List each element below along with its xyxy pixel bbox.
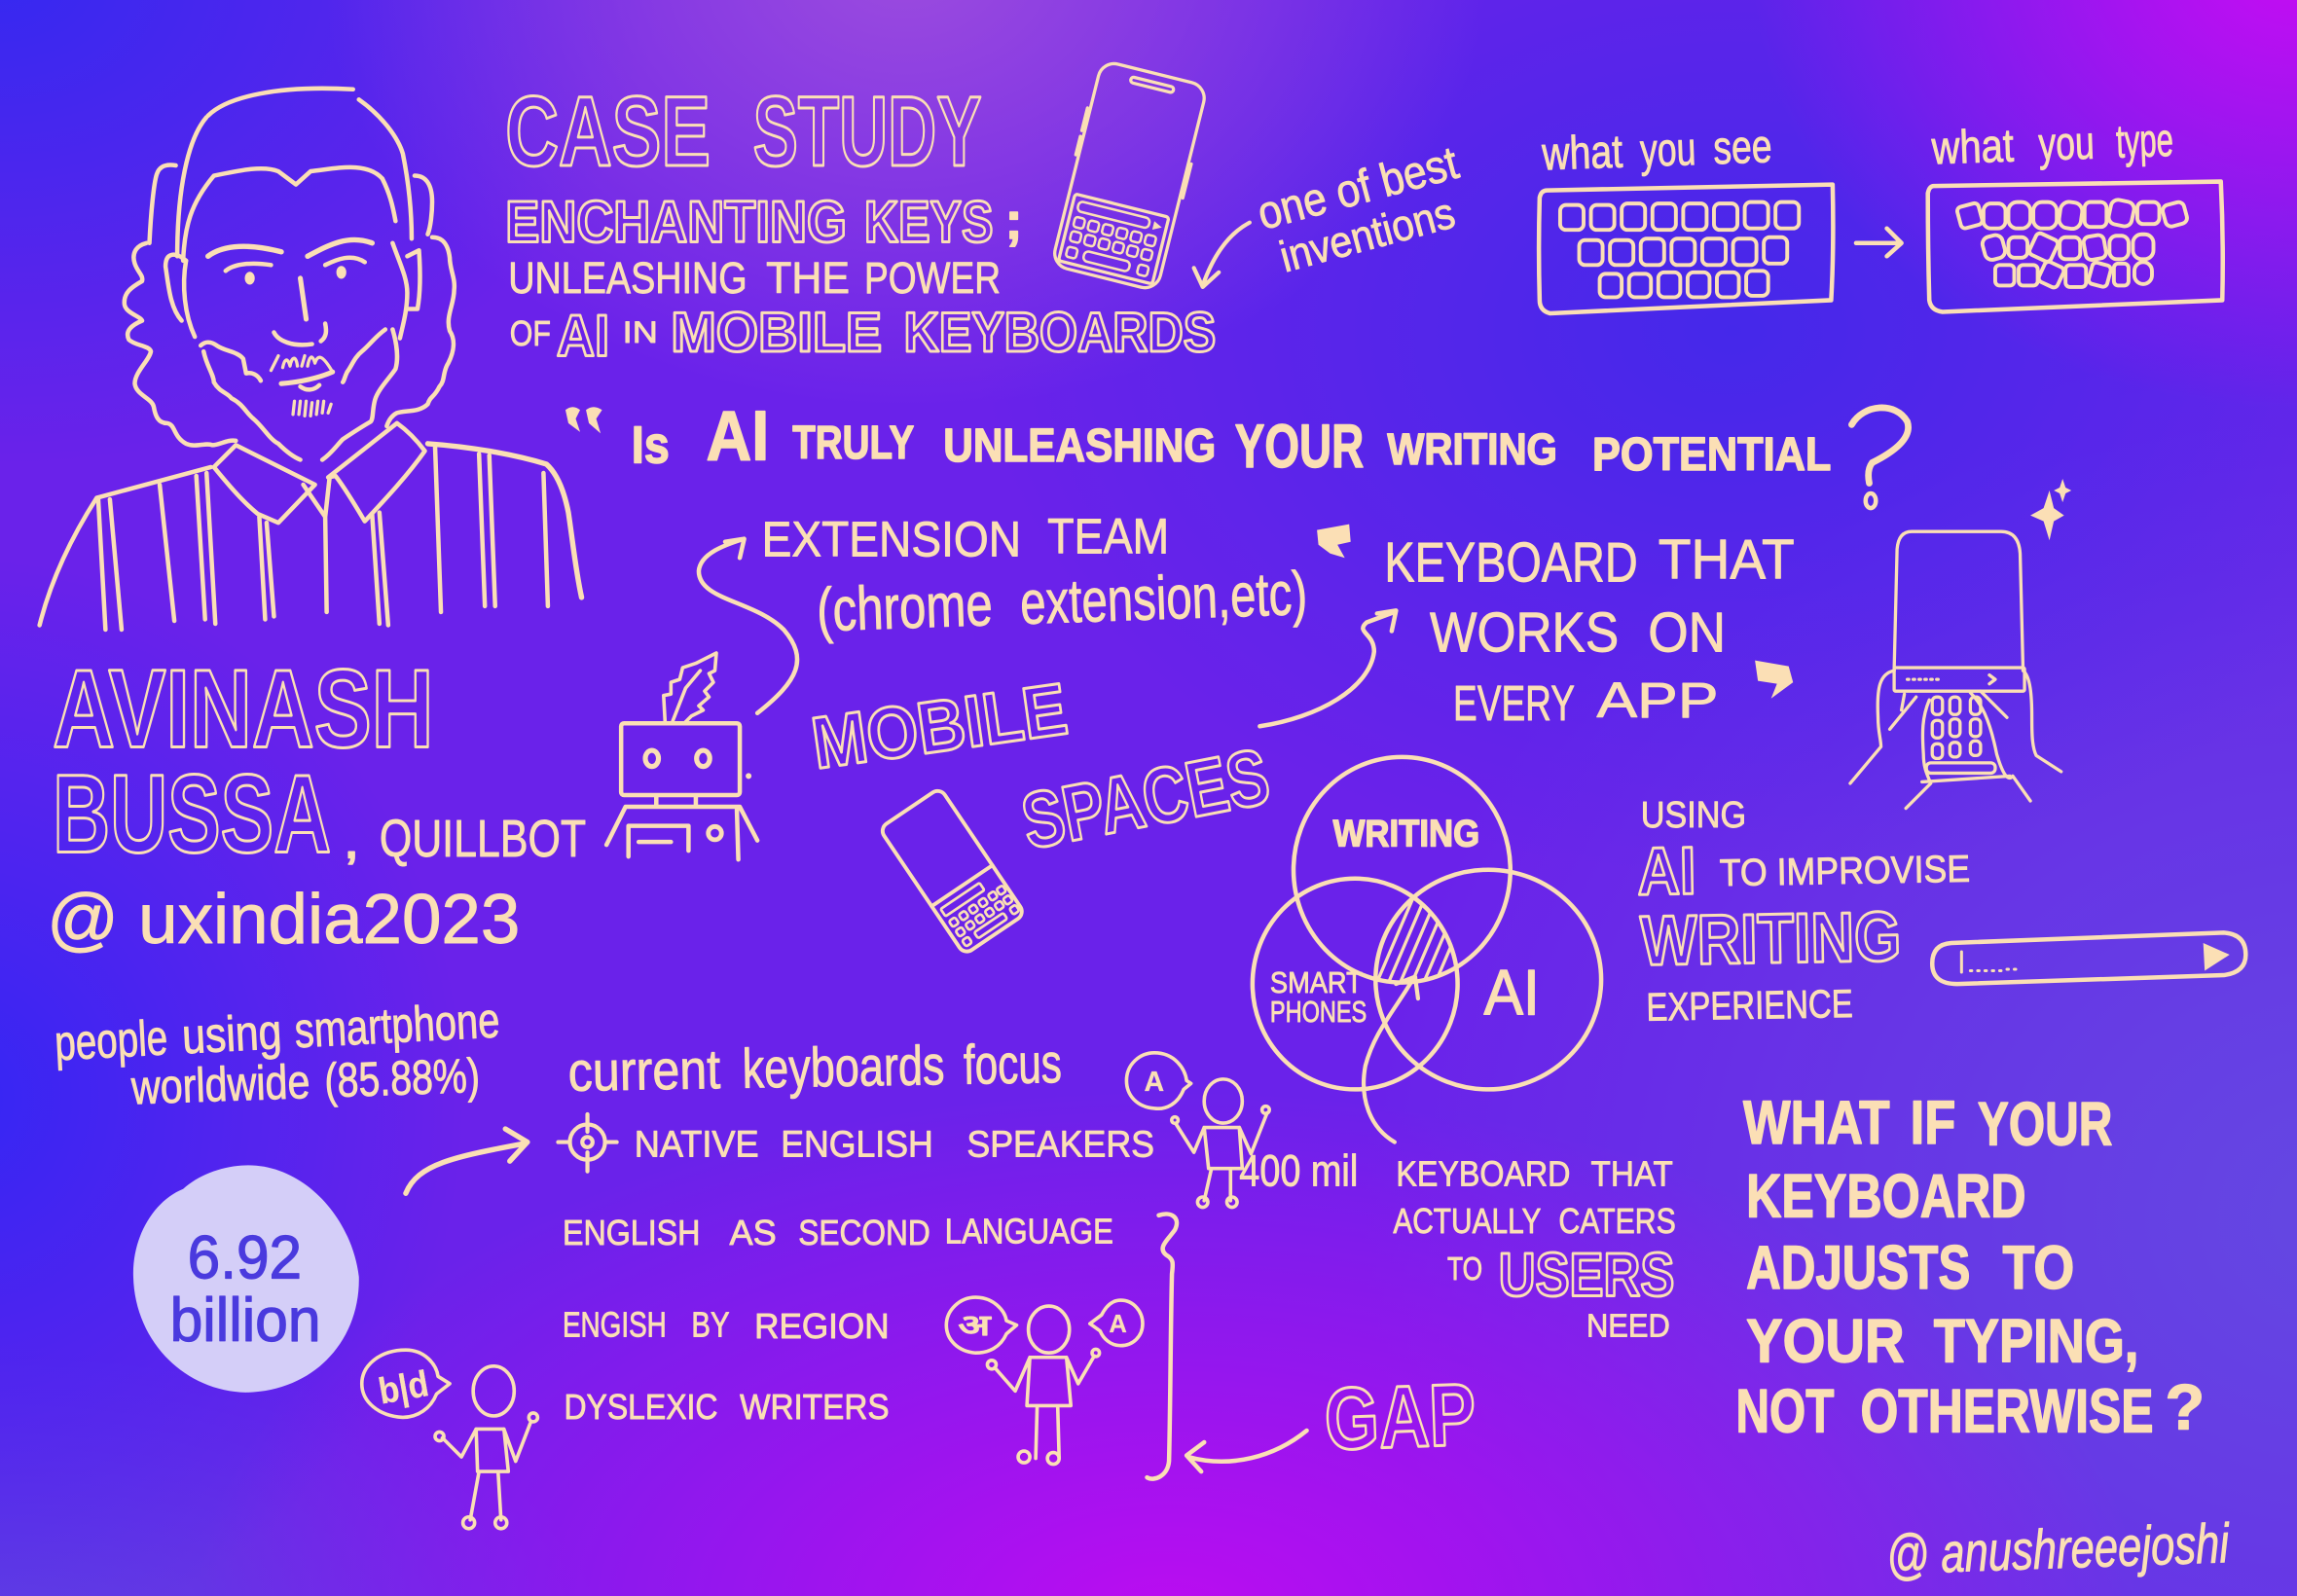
portrait: Avinash Bussa [40,89,582,630]
arrow: stat to keyboards focus [406,1129,528,1193]
icon: sparkles [2030,479,2071,540]
callout: what if your keyboard adjusts: YOUR [1746,1307,1905,1375]
list: keyboard audiences: ENGISH [563,1305,667,1345]
venn diagram: writing, smartphones, AI [1253,757,1601,1089]
callout: what if your keyboard adjusts: NOT [1736,1377,1834,1445]
stat bubble: 6.92 billion: billion [170,1287,321,1355]
text: using AI to improvise writing experience: TO IMPROVISE [1719,849,1970,894]
text: keyboard that actually caters: CATERS [1558,1201,1676,1241]
icon: messy keyboard [1928,182,2223,311]
text: keyboard that actually caters: USERS [1499,1242,1674,1310]
name: Avinash Bussa: , [346,821,357,867]
label: what you see: what [1541,126,1623,181]
callout: what if your keyboard adjusts [1736,1089,2205,1445]
headline question: is AI truly unleashing your writing potential [565,397,1909,508]
title: case study: ; [1005,192,1023,250]
title: case study: OF [510,313,551,353]
list: keyboard audiences: WRITERS [740,1387,890,1427]
stat bubble: 6.92 billion: 6.92 [188,1224,302,1292]
callout: what if your keyboard adjusts: YOUR [1978,1091,2112,1159]
name: Avinash Bussa: QUILLBOT [380,810,586,868]
headline question: is AI truly unleashing your writing potential: POTENTIAL [1592,428,1831,481]
list: keyboard audiences: DYSLEXIC [564,1387,718,1427]
label: what you type [1930,114,2174,175]
venn diagram: writing, smartphones, AI: SMART [1270,967,1363,999]
headline question: is AI truly unleashing your writing potential: AI [706,397,769,475]
callout: what if your keyboard adjusts: OTHERWISE [1860,1377,2153,1445]
text: using AI to improvise writing experience [1637,794,1970,1030]
text: using AI to improvise writing experience: EXPERIENCE [1646,981,1853,1030]
quote: keyboard that works on every app: KEYBOARD [1384,531,1638,594]
handle: @uxindia2023: @ uxindia2023 [47,881,520,959]
annotation: one of best inventions: inventions [1274,188,1460,282]
text: keyboard that actually caters: KEYBOARD [1396,1154,1570,1194]
venn diagram: writing, smartphones, AI: AI [1484,958,1540,1030]
quote: keyboard that works on every app: EVERY [1453,675,1575,731]
figure: dyslexic writer with b/d bubble [362,1350,537,1529]
callout: what if your keyboard adjusts: KEYBOARD [1746,1162,2026,1230]
headline question: is AI truly unleashing your writing potential: WRITING [1387,424,1557,474]
text: using AI to improvise writing experience: WRITING [1640,898,1902,981]
arrow: gap to bracket [1186,1431,1307,1471]
list: keyboard audiences: SPEAKERS [966,1124,1154,1165]
label: gap: GAP [1323,1365,1477,1469]
icon: smartphone with keyboard [1048,59,1211,292]
quote: keyboard that works on every app: APP [1597,672,1718,728]
title: case study: IN [623,314,658,349]
arrow: to keyboard on every app [1259,610,1396,726]
figure: region speaker with two bubbles [946,1297,1143,1465]
arrow: to extension team [699,539,797,713]
list: keyboard audiences: LANGUAGE [945,1211,1113,1251]
text: current keyboards focus: focus [963,1033,1062,1097]
arrow: keyboard need to venn centre [1364,977,1418,1143]
callout: what if your keyboard adjusts: TYPING, [1934,1307,2138,1375]
title: case study: POWER [864,253,1001,303]
icon: quill robot [606,653,757,859]
label: what you type: type [2115,114,2174,168]
annotation: one of best inventions [1194,136,1464,287]
text: keyboard that actually caters: TO [1447,1251,1482,1288]
text: extension team: extension,etc) [1019,560,1308,637]
text: extension team: (chrome [816,570,994,644]
text: current keyboards focus [567,1033,1062,1104]
icon: hands holding phone [1850,531,2061,809]
venn diagram: writing, smartphones, AI: WRITING [1333,814,1479,855]
title: case study [505,75,1216,369]
name: Avinash Bussa [53,646,586,877]
heading: mobile spaces [807,668,1276,866]
title: case study: MOBILE [671,302,882,364]
text: current keyboards focus: keyboards [742,1034,945,1101]
text: current keyboards focus: current [567,1038,721,1104]
headline question: is AI truly unleashing your writing potential: YOUR [1235,413,1364,481]
callout: what if your keyboard adjusts: WHAT [1743,1089,1890,1157]
list: keyboard audiences: BY [691,1305,730,1345]
text: using AI to improvise writing experience: USING [1641,794,1746,835]
text: people using smartphone: worldwide [129,1054,310,1114]
text: keyboard that actually caters: NEED [1586,1309,1670,1345]
list: keyboard audiences: REGION [754,1306,890,1346]
text: keyboard that actually caters [1393,1154,1676,1345]
name: Avinash Bussa: AVINASH [53,646,434,771]
text: people using smartphone [54,992,501,1114]
text: keyboard that actually caters: ACTUALLY [1393,1201,1541,1241]
figure: native speaker with A bubble: A [1144,1067,1164,1098]
text: extension team: TEAM [1047,509,1169,564]
name: Avinash Bussa: BUSSA [53,752,331,877]
text: people using smartphone: using [181,1003,283,1064]
figure: dyslexic writer with b/d bubble: b|d [376,1362,432,1412]
headline question: is AI truly unleashing your writing potential: Is [632,416,670,474]
text: people using smartphone: smartphone [293,992,501,1058]
label: what you type: you [2038,117,2096,171]
figure: region speaker with two bubbles: A [1109,1311,1127,1338]
title: case study: CASE [505,75,711,187]
bracket: gap range [1147,1214,1177,1479]
text: extension team: EXTENSION [762,512,1021,567]
callout: what if your keyboard adjusts: ? [2166,1371,2205,1443]
callout: what if your keyboard adjusts: TO [2002,1234,2074,1302]
label: what you type: what [1930,120,2015,175]
figure: native speaker with A bubble [1126,1053,1269,1208]
list: keyboard audiences: SECOND [798,1213,930,1252]
quote: keyboard that works on every app: WORKS [1430,602,1619,665]
list: keyboard audiences: ENGLISH [781,1124,933,1165]
annotation: one of best inventions: one of best [1252,136,1464,240]
title: case study: THE [766,253,850,303]
venn diagram: writing, smartphones, AI: PHONES [1270,997,1367,1029]
icon: regular keyboard [1539,185,1833,313]
text: people using smartphone: people [54,1009,169,1070]
callout: what if your keyboard adjusts: IF [1911,1089,1955,1157]
title: case study: AI [557,304,609,369]
icon: target [558,1114,617,1172]
list: keyboard audiences: ENGLISH [563,1213,700,1252]
arrow: see to type [1856,229,1902,256]
quote: keyboard that works on every app: THAT [1659,528,1795,591]
figure: region speaker with two bubbles: अ [958,1310,992,1342]
label: 400 mil: 400 mil [1239,1146,1358,1196]
list: keyboard audiences [563,1124,1154,1427]
text: extension team [762,509,1308,644]
heading: mobile spaces: MOBILE [807,668,1072,784]
quote: keyboard that works on every app [1317,525,1795,731]
text: using AI to improvise writing experience: AI [1637,832,1696,909]
label: what you see: see [1712,120,1772,174]
quote: keyboard that works on every app: ON [1648,602,1726,665]
text: people using smartphone: (85.88%) [323,1048,481,1108]
icon: search bar [1932,932,2245,984]
title: case study: KEYS [864,189,993,254]
label: what you see [1541,120,1772,181]
title: case study: STUDY [753,75,981,187]
title: case study: KEYBOARDS [904,302,1216,364]
heading: mobile spaces: SPACES [1015,732,1276,866]
headline question: is AI truly unleashing your writing potential: TRULY [792,417,914,469]
list: keyboard audiences: NATIVE [635,1124,759,1165]
text: keyboard that actually caters: THAT [1591,1154,1673,1194]
list: keyboard audiences: AS [730,1213,777,1252]
stat bubble: 6.92 billion [133,1165,359,1393]
callout: what if your keyboard adjusts: ADJUSTS [1746,1234,1970,1302]
headline question: is AI truly unleashing your writing potential: UNLEASHING [943,419,1216,472]
title: case study: ENCHANTING [505,189,847,254]
title: case study: UNLEASHING [508,253,747,303]
icon: tilted phone [879,787,1025,955]
label: what you see: you [1639,123,1696,177]
